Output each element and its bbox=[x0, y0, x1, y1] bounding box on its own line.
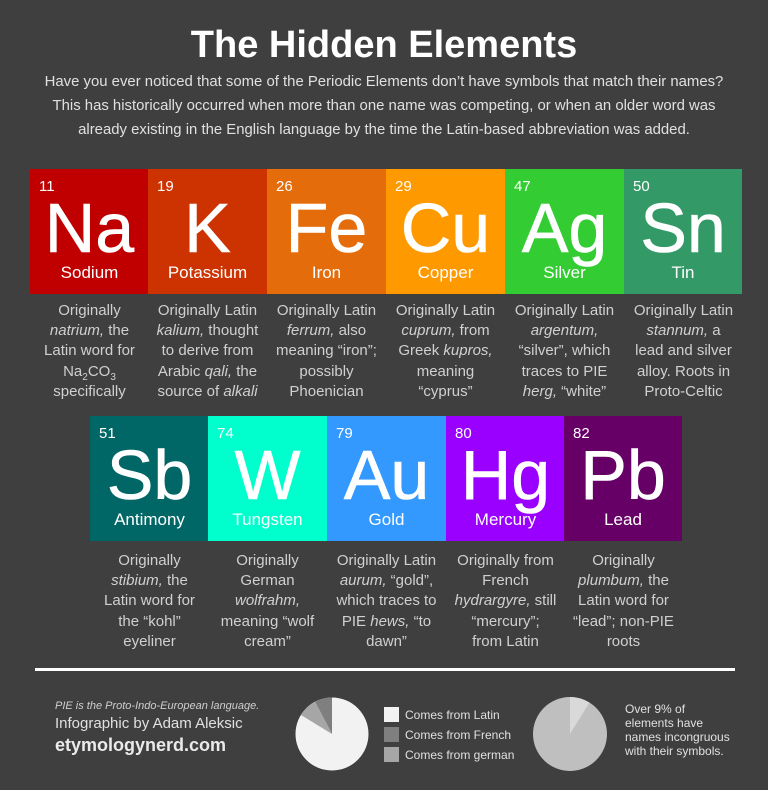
desc: W: wolfrahm, bbox=[235, 592, 300, 609]
tile: Fe: Fe bbox=[286, 189, 367, 267]
pie chart: origins bbox=[296, 698, 368, 770]
tile: Hg: Hg bbox=[461, 436, 550, 514]
desc: W: Originally bbox=[236, 552, 299, 569]
desc: Fe bbox=[276, 302, 377, 400]
tile: Fe: 26 bbox=[276, 178, 293, 195]
tile: Sb: 51 bbox=[99, 425, 116, 442]
desc: W bbox=[221, 552, 314, 650]
tile: Pb: Pb bbox=[580, 436, 666, 514]
tile: Sn: Sn bbox=[640, 189, 726, 267]
desc: Cu bbox=[396, 302, 495, 400]
tile: Na bbox=[30, 169, 149, 294]
desc: Hg: Originally from bbox=[457, 552, 554, 569]
tile: Ag: 47 bbox=[514, 178, 531, 195]
desc: Pb: “lead”; non-PIE bbox=[573, 613, 674, 630]
legend bbox=[384, 707, 514, 762]
desc: Na: Originally bbox=[58, 302, 121, 319]
desc: Fe: ferrum, also bbox=[287, 322, 366, 339]
desc: Fe: meaning “iron”; bbox=[276, 342, 377, 359]
desc: W: German bbox=[240, 572, 295, 589]
tile: Sb bbox=[90, 416, 209, 541]
desc: Cu: cuprum, from bbox=[401, 322, 490, 339]
desc: Au: which traces to bbox=[336, 592, 437, 609]
tile: K: K bbox=[184, 189, 231, 267]
tile: K: 19 bbox=[157, 178, 174, 195]
desc: Sb bbox=[104, 552, 195, 650]
desc: Ag bbox=[515, 302, 614, 400]
desc: K: source of alkali bbox=[157, 383, 258, 400]
desc: Fe: Originally Latin bbox=[277, 302, 376, 319]
tile: Ag bbox=[505, 169, 624, 294]
tile: W: Tungsten bbox=[232, 510, 303, 529]
desc: Hg: French bbox=[482, 572, 529, 589]
tile: Au: 79 bbox=[336, 425, 353, 442]
tile: Au bbox=[327, 416, 446, 541]
desc: K: Originally Latin bbox=[158, 302, 257, 319]
intro text: Have you ever noticed that some of the Periodic Elements don’t have symbols that match their names? bbox=[45, 74, 723, 90]
pie chart: incongruous bbox=[533, 697, 607, 771]
tile: Hg: Mercury bbox=[475, 510, 536, 529]
desc: Sb: Latin word for bbox=[104, 592, 195, 609]
desc: Sn bbox=[634, 302, 733, 400]
desc: Fe: Phoenician bbox=[289, 383, 364, 400]
desc: Cu: Originally Latin bbox=[396, 302, 495, 319]
desc: Hg: “mercury”; bbox=[471, 613, 540, 630]
tile: Sn: 50 bbox=[633, 178, 650, 195]
desc: Ag: “silver”, which bbox=[519, 342, 610, 359]
legend: Comes from Latin bbox=[405, 708, 500, 722]
tile: Sb: Antimony bbox=[114, 510, 185, 529]
tile: Hg: 80 bbox=[455, 425, 472, 442]
desc: Sb: eyeliner bbox=[123, 633, 176, 650]
desc: Na: Na2CO3 bbox=[63, 363, 116, 383]
tile: W: W bbox=[234, 436, 301, 514]
tile: Ag: Silver bbox=[543, 263, 586, 282]
desc: Cu: Greek kupros, bbox=[398, 342, 493, 359]
tile: Na: 11 bbox=[39, 178, 55, 195]
tile: Na: Sodium bbox=[61, 263, 118, 282]
stat text: names incongruous bbox=[625, 730, 730, 744]
desc: K: Arabic qali, the bbox=[158, 363, 257, 380]
tile: Fe: Iron bbox=[312, 263, 341, 282]
desc: Ag: Originally Latin bbox=[515, 302, 614, 319]
desc: Au: aurum, “gold”, bbox=[340, 572, 433, 589]
legend: Comes from French bbox=[405, 728, 511, 742]
stat text: Over 9% of bbox=[625, 702, 685, 716]
tile: Sn: Tin bbox=[672, 263, 694, 282]
desc: Hg: hydrargyre, still bbox=[455, 592, 556, 609]
tile: Na: Na bbox=[45, 189, 134, 267]
desc: Cu: “cyprus” bbox=[418, 383, 473, 400]
tile: Cu: 29 bbox=[395, 178, 412, 195]
credits: etymologynerd.com bbox=[55, 735, 226, 755]
desc: Hg bbox=[454, 552, 556, 650]
tile: Fe bbox=[267, 169, 386, 294]
desc: W: cream” bbox=[244, 633, 291, 650]
desc: W: meaning “wolf bbox=[221, 613, 314, 630]
desc: Sb: stibium, the bbox=[111, 572, 188, 589]
stat text: elements have bbox=[625, 716, 703, 730]
tile: Pb bbox=[564, 416, 682, 541]
desc: Au: dawn” bbox=[366, 633, 407, 650]
legend: Comes from german bbox=[405, 748, 514, 762]
tile: Cu bbox=[386, 169, 505, 294]
credits bbox=[55, 700, 259, 755]
desc: Cu: meaning bbox=[417, 363, 474, 380]
desc: Sn: stannum, a bbox=[646, 322, 721, 339]
desc: K: to derive from bbox=[162, 342, 253, 359]
desc: K bbox=[156, 302, 258, 400]
desc: Fe: possibly bbox=[299, 363, 354, 380]
tile: Au: Au bbox=[344, 436, 429, 514]
desc: Au: PIE hews, “to bbox=[342, 613, 431, 630]
desc: Sb: the “kohl” bbox=[118, 613, 181, 630]
stat text: with their symbols. bbox=[625, 744, 724, 758]
desc: Na: Latin word for bbox=[44, 342, 135, 359]
desc: Na: natrium, the bbox=[50, 322, 129, 339]
credits: Infographic by Adam Aleksic bbox=[55, 715, 243, 732]
desc: K: kalium, thought bbox=[157, 322, 258, 339]
intro text bbox=[45, 74, 723, 138]
desc: Sn: alloy. Roots in bbox=[637, 363, 730, 380]
desc: Ag: herg, “white” bbox=[523, 383, 606, 400]
tile: Pb: 82 bbox=[573, 425, 590, 442]
desc: Pb: Latin word for bbox=[578, 592, 669, 609]
desc: Hg: from Latin bbox=[472, 633, 539, 650]
tile: K bbox=[148, 169, 267, 294]
intro text: already existing in the English language by the time the Latin-based abbreviation was added. bbox=[78, 122, 690, 138]
tile: Hg bbox=[446, 416, 565, 541]
desc: Au: Originally Latin bbox=[337, 552, 436, 569]
desc: Na: specifically bbox=[53, 383, 126, 400]
tile: Pb: Lead bbox=[604, 510, 642, 529]
desc: Pb bbox=[573, 552, 674, 650]
tile: Sb: Sb bbox=[107, 436, 192, 514]
desc: Sn: Originally Latin bbox=[634, 302, 733, 319]
tile: W bbox=[208, 416, 327, 541]
tile: W: 74 bbox=[217, 425, 234, 442]
desc: Ag: traces to PIE bbox=[522, 363, 607, 380]
tile: K: Potassium bbox=[168, 263, 247, 282]
desc: Pb: roots bbox=[607, 633, 640, 650]
intro text: This has historically occurred when more than one name was competing, or when an older word was bbox=[53, 98, 715, 114]
tile: Ag: Ag bbox=[522, 189, 607, 267]
stat text bbox=[625, 702, 730, 758]
desc: Au bbox=[336, 552, 437, 650]
desc: Sn: lead and silver bbox=[635, 342, 732, 359]
desc: Ag: argentum, bbox=[531, 322, 598, 339]
credits: PIE is the Proto-Indo-European language. bbox=[55, 700, 259, 712]
desc: Na bbox=[44, 302, 135, 400]
desc: Pb: Originally bbox=[592, 552, 655, 569]
tile: Au: Gold bbox=[369, 510, 404, 529]
desc: Pb: plumbum, the bbox=[578, 572, 669, 589]
desc: Sb: Originally bbox=[118, 552, 181, 569]
tile: Cu: Copper bbox=[418, 263, 473, 282]
tile: Sn bbox=[624, 169, 742, 294]
tile: Cu: Cu bbox=[401, 189, 490, 267]
title: The Hidden Elements bbox=[191, 24, 577, 66]
desc: Sn: Proto-Celtic bbox=[644, 383, 723, 400]
